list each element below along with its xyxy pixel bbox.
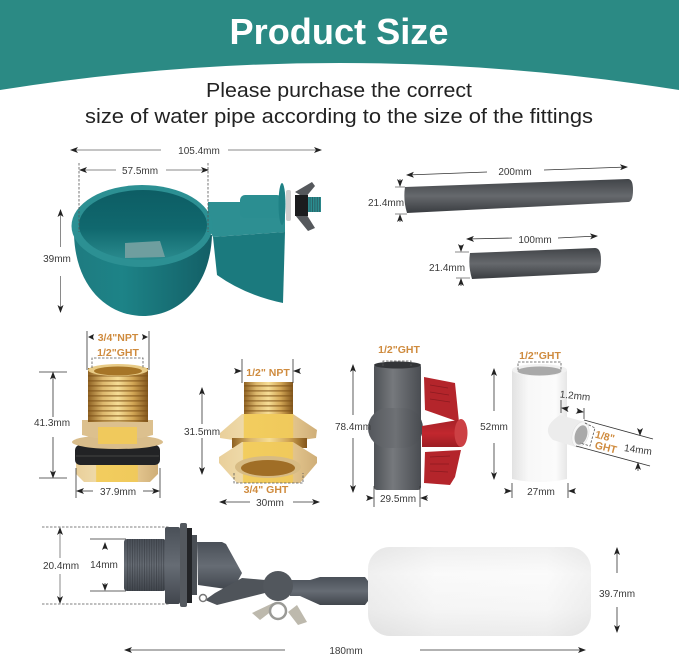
dimension: 21.4mm upper: [368, 179, 407, 222]
header band: [0, 0, 679, 90]
dimension: 21.4mm lower: [429, 245, 470, 286]
dimension: 100mm: [467, 235, 597, 246]
dimension: 14mm: [90, 539, 126, 591]
dimension: 1/2"GHT: 1/2"GHT: [519, 350, 561, 362]
dimension: 1/2"GHT: [378, 344, 420, 366]
dimension: 52mm: [480, 369, 508, 479]
dimension: 31.5mm: [184, 388, 220, 474]
dimension: 1/2"GHT: 1/2"GHT: [378, 344, 420, 356]
subtitle: [85, 80, 593, 128]
dimension: 29.5mm: [367, 486, 428, 507]
dimension: 41.3mm: [34, 372, 70, 478]
dimension: 41.3mm: 41.3mm: [34, 418, 70, 429]
dimension: 39.7mm: 39.7mm: [599, 589, 635, 600]
title: Product Size: [230, 11, 448, 52]
icon: float valve: [124, 523, 591, 636]
dimension: 200mm: 200mm: [498, 167, 532, 178]
icon: bracket: [208, 182, 321, 303]
dimension: 21.4mm lower: 21.4mm: [429, 263, 465, 274]
dimension: 57.5mm: 57.5mm: [122, 166, 158, 177]
dimension: 1/8" GHT: GHT: [594, 439, 619, 457]
subtitle: Please purchase the correct: [206, 80, 472, 102]
dimension: 29.5mm: 29.5mm: [380, 494, 416, 505]
panel: tee fitting: [480, 350, 653, 498]
icon: valve: [368, 362, 468, 490]
dimension: 37.9mm: 37.9mm: [100, 487, 136, 498]
dimension: 14mm: [576, 420, 653, 471]
dimension: 78.4mm: [335, 365, 371, 492]
dimension: 3/4" GHT: 3/4" GHT: [244, 484, 289, 496]
dimension: 39mm: 39mm: [43, 254, 71, 265]
dimension: 30mm: 30mm: [256, 498, 284, 509]
icon: bowl: [72, 185, 212, 316]
dimension: 1/2" NPT: [235, 359, 300, 383]
dimension: 31.5mm: 31.5mm: [184, 427, 220, 438]
dimension: 1/2"GHT: 1/2"GHT: [97, 347, 139, 359]
dimension: 200mm: [407, 167, 627, 178]
icon: tee: [512, 364, 592, 482]
dimension: 1.2mm: 1.2mm: [559, 389, 591, 404]
panel: brass bulkhead fitting: [34, 331, 163, 498]
dimension: 37.9mm: [76, 468, 160, 498]
dimension: 1/8" GHT: 1/8": [594, 429, 616, 445]
dimension: 3/4" GHT: [234, 473, 303, 496]
dimension: 14mm: 14mm: [623, 443, 652, 458]
dimension: 30mm: [220, 498, 319, 509]
dimension: 105.4mm: 105.4mm: [178, 146, 220, 157]
dimension: 27mm: 27mm: [527, 487, 555, 498]
dimension: 27mm: [505, 483, 575, 498]
panel: float valve: [42, 523, 635, 655]
icon: long pipe: [404, 179, 633, 213]
icon: brass fitting: [72, 364, 163, 482]
dimension: 1/2"GHT: [518, 350, 561, 370]
dimension: 57.5mm: [79, 163, 208, 232]
icon: short pipe: [469, 248, 601, 279]
icon: brass adapter: [219, 382, 317, 483]
panel: ball valve: [335, 344, 468, 507]
dimension: 39.7mm: [599, 548, 635, 632]
panel: cup drinker: [43, 146, 321, 316]
dimension: 21.4mm upper: 21.4mm: [368, 198, 404, 209]
dimension: 14mm: 14mm: [90, 560, 118, 571]
dimension: 1/2" NPT: 1/2" NPT: [246, 367, 290, 379]
panel: brass adapter: [184, 359, 319, 509]
panel: pipes: [368, 167, 633, 286]
dimension: 1.2mm: [559, 389, 591, 419]
dimension: 20.4mm: [42, 527, 170, 604]
dimension: 1/2"GHT: [92, 347, 143, 368]
dimension: 3/4"NPT: [87, 331, 149, 370]
dimension: 39mm: [43, 210, 71, 312]
dimension: 20.4mm: 20.4mm: [43, 561, 79, 572]
dimension: 78.4mm: 78.4mm: [335, 422, 371, 433]
dimension: 3/4"NPT: 3/4"NPT: [98, 332, 139, 344]
dimension: 100mm: 100mm: [518, 235, 552, 246]
dimension: 1/8" GHT: [580, 423, 619, 457]
dimension: 52mm: 52mm: [480, 422, 508, 433]
subtitle: size of water pipe according to the size of the fittings: [85, 106, 593, 128]
